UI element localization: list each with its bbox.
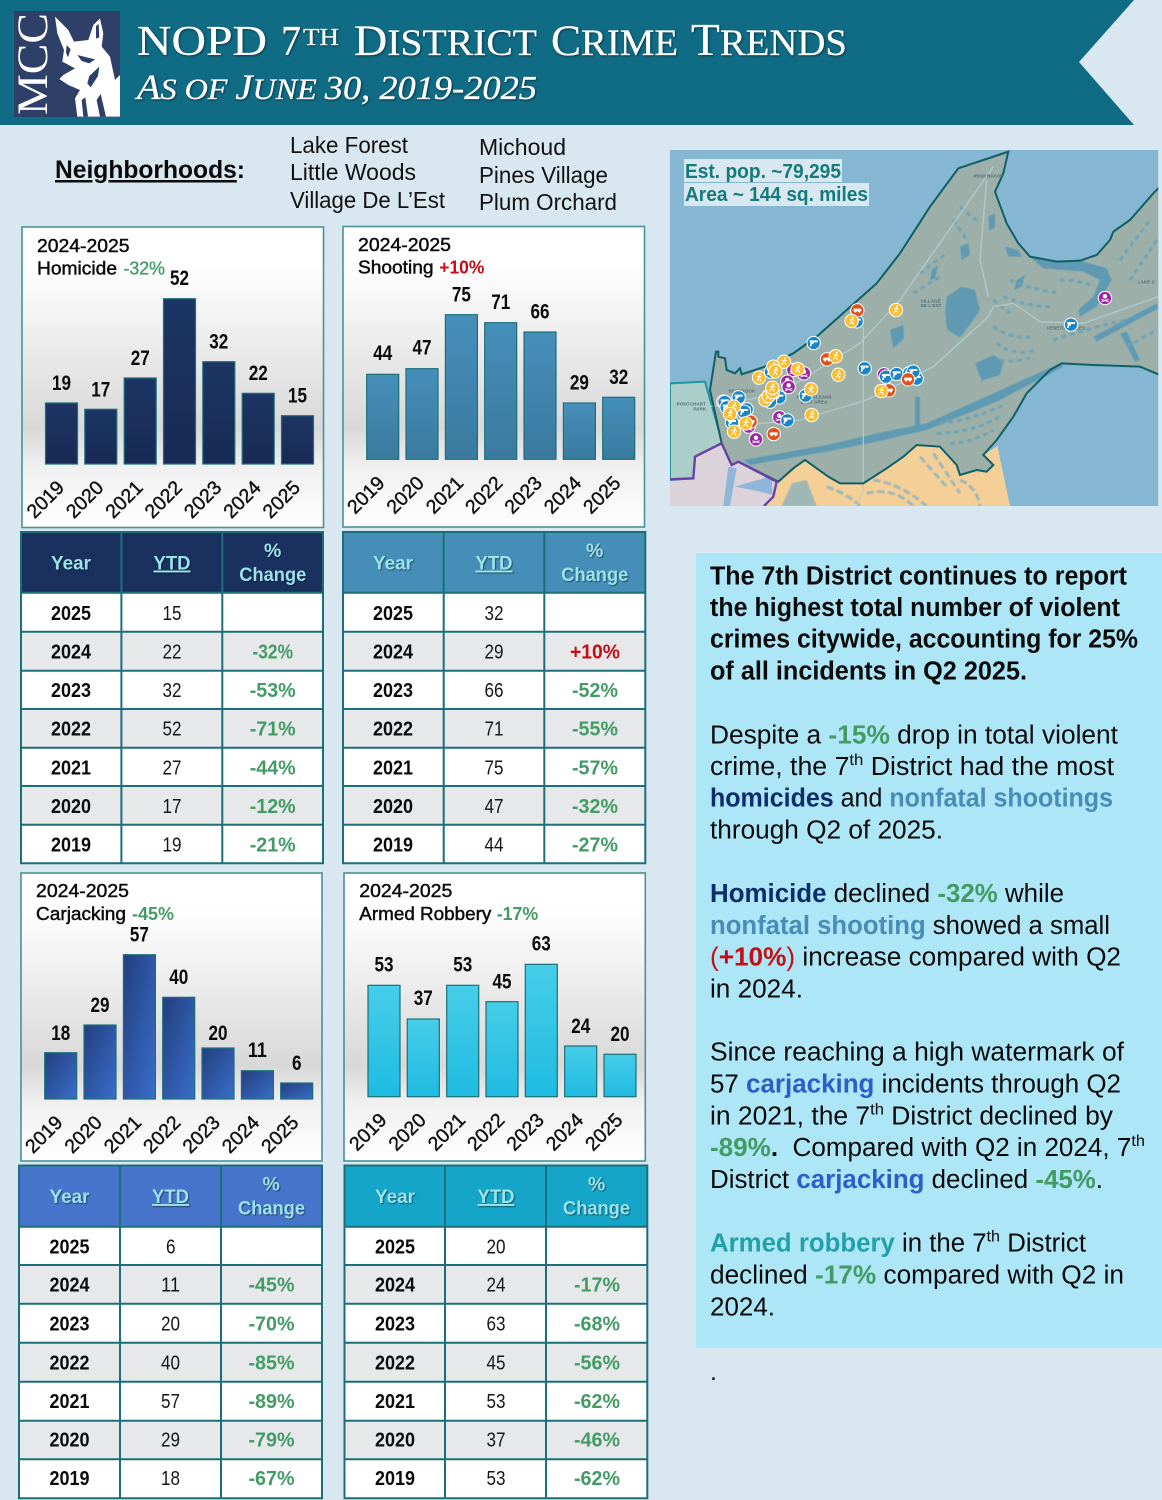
map: place labels: PONTCHART bbox=[677, 401, 706, 406]
table rows: homicide: 2019 bbox=[51, 834, 91, 856]
year axis: carjacking: 2019 bbox=[21, 1112, 67, 1158]
map callout: population and area: Est. pop. ~79,295 bbox=[685, 161, 841, 183]
values: carjacking bbox=[51, 924, 302, 1075]
chart title: carjacking: 2024-2025 bbox=[36, 881, 129, 901]
table rows: shooting: 2019 bbox=[373, 834, 413, 856]
table rows: armed robbery: -56% bbox=[574, 1352, 620, 1374]
table rows: armed robbery: 53 bbox=[486, 1391, 506, 1413]
text: armed robbery bbox=[710, 1229, 1124, 1321]
table rows: carjacking: -45% bbox=[248, 1275, 295, 1297]
logo: MCC wolf: MCC bbox=[10, 13, 57, 115]
values: armed robbery: 45 bbox=[492, 970, 512, 994]
table rows: shooting: 47 bbox=[484, 796, 504, 818]
table: homicide bbox=[21, 532, 323, 863]
table rows: shooting: -52% bbox=[572, 680, 618, 702]
values: homicide: 17 bbox=[91, 378, 110, 401]
panel: narrative bbox=[696, 553, 1162, 1348]
text: homicide and shooting bbox=[710, 880, 1121, 1003]
values: carjacking: 18 bbox=[51, 1022, 70, 1045]
year axis: homicide: 2023 bbox=[180, 477, 226, 523]
table header: armed robbery: YTD bbox=[478, 1186, 514, 1208]
title: NOPD bbox=[137, 19, 267, 65]
table rows: homicide: 2024 bbox=[51, 641, 92, 663]
table header: shooting: % bbox=[586, 540, 603, 562]
table rows: armed robbery: 2020 bbox=[375, 1430, 415, 1452]
year axis: shooting: 2024 bbox=[540, 472, 586, 518]
table rows: shooting: -27% bbox=[572, 834, 618, 856]
table rows: homicide: 15 bbox=[162, 603, 182, 625]
map: place labels: PARK bbox=[693, 407, 707, 412]
table rows: homicide: 19 bbox=[162, 834, 182, 856]
logo: MCC wolf bbox=[10, 11, 120, 117]
neighborhoods list, column 1 bbox=[290, 132, 446, 213]
year axis: shooting: 2020 bbox=[382, 472, 429, 518]
year axis: homicide: 2022 bbox=[141, 477, 187, 523]
text: key finding bbox=[710, 562, 1138, 685]
map: place labels: DE L'EST bbox=[921, 303, 942, 308]
table rows: homicide: -12% bbox=[250, 796, 296, 818]
year axis: carjacking: 2024 bbox=[218, 1112, 264, 1158]
table rows: shooting: 2023 bbox=[373, 680, 413, 702]
map: waterways bbox=[743, 213, 1158, 465]
values: carjacking: 11 bbox=[248, 1039, 267, 1062]
table rows: homicide: 2022 bbox=[51, 718, 91, 740]
text: carjacking: 57 carjacking incidents through Q2 bbox=[710, 1070, 1121, 1098]
table rows: carjacking: 2022 bbox=[50, 1352, 90, 1374]
bars: shooting bbox=[367, 315, 635, 459]
text: homicide and shooting: Homicide declined -32% while bbox=[710, 880, 1064, 908]
text: overall drop: crime, the 7 bbox=[710, 753, 843, 781]
values: homicide: 32 bbox=[209, 330, 228, 354]
table rows: armed robbery: 37 bbox=[486, 1430, 506, 1452]
title bbox=[137, 15, 847, 65]
text: carjacking bbox=[710, 1039, 1145, 1194]
table rows: shooting: -55% bbox=[572, 718, 618, 740]
table rows: shooting: 2024 bbox=[373, 641, 414, 663]
year axis: armed robbery: 2022 bbox=[463, 1109, 509, 1155]
neighborhoods list, column 2: Michoud bbox=[479, 134, 566, 160]
values: shooting: 44 bbox=[373, 342, 392, 365]
chart title: armed robbery bbox=[359, 881, 538, 924]
map: place labels: VILLAGE bbox=[921, 298, 941, 303]
table rows: shooting: 2020 bbox=[373, 796, 413, 818]
chart title: shooting: 2024-2025 bbox=[358, 235, 451, 255]
text: key finding: crimes citywide, accounting for 25% bbox=[710, 626, 1138, 654]
table rows: homicide: 17 bbox=[162, 796, 182, 818]
title: TH bbox=[303, 25, 339, 51]
table rows: shooting: 2022 bbox=[373, 718, 413, 740]
table rows: shooting: 71 bbox=[484, 718, 504, 740]
table header: shooting: Change bbox=[561, 564, 628, 586]
year axis: shooting: 2023 bbox=[500, 472, 547, 518]
header banner bbox=[0, 0, 1134, 125]
year axis: carjacking: 2025 bbox=[257, 1112, 303, 1158]
table header: armed robbery: Year bbox=[375, 1186, 415, 1208]
title: DISTRICT bbox=[354, 18, 537, 65]
text: armed robbery: Armed robbery in the 7 bbox=[710, 1230, 986, 1258]
table rows: shooting: -57% bbox=[572, 757, 618, 779]
values: armed robbery bbox=[374, 933, 630, 1046]
year axis: shooting bbox=[343, 472, 625, 518]
values: armed robbery: 37 bbox=[414, 987, 433, 1010]
map: place labels: EAST AREA bbox=[801, 400, 828, 405]
text: armed robbery: 2024. bbox=[710, 1293, 775, 1321]
table rows: carjacking: 18 bbox=[161, 1468, 180, 1490]
table rows: armed robbery: -62% bbox=[574, 1468, 620, 1490]
values: shooting: 66 bbox=[530, 300, 550, 324]
text: overall drop: th bbox=[849, 752, 863, 769]
text: carjacking: -89%. Compared with Q2 in 2024, 7 bbox=[710, 1134, 1124, 1162]
text: homicide and shooting: (+10%) increase compared with Q2 bbox=[710, 944, 1121, 972]
table rows: homicide: -21% bbox=[250, 834, 296, 856]
text: overall drop: homicides and nonfatal shootings bbox=[710, 785, 1113, 813]
chart title: homicide bbox=[37, 236, 165, 278]
chart title: shooting bbox=[358, 235, 484, 278]
table rows: armed robbery: 63 bbox=[486, 1313, 506, 1335]
year axis: homicide: 2021 bbox=[101, 477, 148, 523]
table rows: armed robbery: -17% bbox=[574, 1275, 620, 1297]
title: TRENDS bbox=[691, 15, 847, 65]
title: CRIME bbox=[551, 18, 678, 65]
table rows: homicide: 2020 bbox=[51, 796, 91, 818]
chart title: shooting: +10% bbox=[439, 258, 484, 278]
map: sand area bbox=[767, 445, 1010, 506]
values: shooting: 32 bbox=[609, 366, 628, 389]
table header: shooting: YTD bbox=[476, 552, 512, 574]
neighborhoods list, column 1: Little Woods bbox=[290, 159, 416, 185]
table rows: shooting: -32% bbox=[572, 796, 618, 818]
table rows: armed robbery: 24 bbox=[486, 1275, 506, 1297]
table rows: armed robbery: 2025 bbox=[375, 1236, 415, 1258]
table rows: shooting: 29 bbox=[484, 641, 504, 663]
chart title: armed robbery: Armed Robbery bbox=[359, 904, 491, 924]
year axis: armed robbery: 2024 bbox=[542, 1109, 588, 1155]
table rows: carjacking: 6 bbox=[166, 1236, 176, 1258]
chart title: armed robbery: -17% bbox=[497, 904, 538, 924]
values: shooting bbox=[373, 284, 628, 394]
text: carjacking: th bbox=[870, 1101, 884, 1118]
values: homicide: 52 bbox=[170, 267, 189, 290]
values: shooting: 75 bbox=[452, 284, 471, 306]
chart title: shooting: Shooting bbox=[358, 258, 434, 278]
year axis: homicide: 2019 bbox=[23, 477, 69, 523]
table rows: homicide: 22 bbox=[162, 641, 182, 663]
chart title: carjacking: Carjacking bbox=[36, 904, 126, 924]
table rows: homicide: -71% bbox=[250, 718, 296, 740]
map: place labels: SEABROOK bbox=[728, 388, 756, 393]
panel: carjacking chart bbox=[21, 873, 322, 1161]
map: incident markers bbox=[717, 291, 1112, 446]
map: 7th district land bbox=[710, 152, 1158, 483]
neighborhoods list, column 2 bbox=[479, 134, 617, 215]
table rows: homicide: -32% bbox=[252, 641, 293, 663]
year axis: shooting: 2022 bbox=[461, 472, 507, 518]
text: key finding: The 7th District continues to report bbox=[710, 562, 1127, 590]
chart title: carjacking bbox=[36, 881, 174, 924]
year axis: carjacking: 2020 bbox=[60, 1112, 107, 1158]
year axis: armed robbery: 2025 bbox=[581, 1109, 627, 1155]
table rows: homicide: 27 bbox=[162, 757, 182, 779]
year axis: homicide bbox=[23, 477, 305, 523]
map: 7th district incidents bbox=[670, 150, 1160, 506]
year axis: carjacking: 2021 bbox=[100, 1112, 146, 1158]
table rows: shooting: 75 bbox=[484, 757, 504, 779]
values: armed robbery: 63 bbox=[532, 933, 551, 956]
year axis: homicide: 2025 bbox=[259, 477, 305, 523]
table header: homicide bbox=[51, 540, 306, 586]
table rows: armed robbery: -62% bbox=[574, 1391, 620, 1413]
chart title: homicide: 2024-2025 bbox=[37, 236, 130, 256]
neighborhoods heading: Neighborhoods: bbox=[55, 156, 245, 184]
map callout: population and area bbox=[684, 159, 869, 206]
chart title: carjacking: -45% bbox=[132, 904, 174, 924]
text: overall drop bbox=[710, 721, 1118, 844]
table rows: carjacking: -89% bbox=[248, 1391, 295, 1413]
values: carjacking: 40 bbox=[169, 966, 188, 989]
table: carjacking bbox=[19, 1166, 322, 1498]
table rows: carjacking: -85% bbox=[248, 1352, 295, 1374]
table header: carjacking: Change bbox=[238, 1198, 305, 1220]
values: homicide: 19 bbox=[52, 372, 71, 395]
values: shooting: 71 bbox=[491, 291, 510, 314]
stray period: . bbox=[710, 1358, 717, 1386]
map: place labels: LAKE C bbox=[1138, 279, 1156, 284]
values: armed robbery: 24 bbox=[571, 1015, 590, 1038]
map: marsh texture bbox=[913, 207, 1157, 443]
table rows: carjacking: 20 bbox=[161, 1313, 180, 1335]
title: 7 bbox=[281, 19, 301, 65]
values: homicide bbox=[52, 267, 307, 408]
table rows: homicide: 52 bbox=[162, 718, 182, 740]
table rows: armed robbery: 2024 bbox=[375, 1275, 416, 1297]
table rows: carjacking: 2024 bbox=[50, 1275, 90, 1297]
values: carjacking: 29 bbox=[90, 994, 110, 1017]
table rows: armed robbery: 2022 bbox=[375, 1352, 415, 1374]
year axis: armed robbery: 2021 bbox=[424, 1109, 470, 1155]
year axis: armed robbery: 2023 bbox=[502, 1109, 549, 1155]
table rows: shooting: 2021 bbox=[373, 757, 413, 779]
table header: homicide: % bbox=[264, 540, 281, 562]
table header: armed robbery: Change bbox=[563, 1198, 630, 1220]
chart title: homicide: Homicide bbox=[37, 258, 117, 278]
year axis: shooting: 2025 bbox=[579, 472, 625, 518]
values: shooting: 29 bbox=[570, 372, 589, 394]
panel: homicide chart bbox=[22, 227, 324, 528]
map: neighbouring district, teal bbox=[670, 382, 722, 480]
text: carjacking: th bbox=[1131, 1133, 1145, 1150]
table rows: armed robbery: 53 bbox=[486, 1468, 506, 1490]
table rows: carjacking: -79% bbox=[248, 1430, 295, 1452]
table rows: carjacking bbox=[50, 1236, 295, 1490]
table header: shooting: Year bbox=[373, 552, 413, 574]
table rows: homicide: 2021 bbox=[51, 757, 91, 779]
map: marsh water in sand bbox=[782, 453, 980, 506]
table header: carjacking: Year bbox=[50, 1186, 90, 1208]
year axis: shooting: 2021 bbox=[422, 472, 468, 518]
map: place labels: VENETIAN ISLES bbox=[1047, 326, 1085, 331]
map: roads bbox=[710, 167, 1158, 506]
values: shooting: 47 bbox=[412, 336, 432, 360]
year axis: homicide: 2024 bbox=[219, 477, 266, 523]
values: armed robbery: 53 bbox=[374, 954, 394, 977]
neighborhoods list, column 2: Pines Village bbox=[479, 162, 608, 188]
chart title: homicide: -32% bbox=[124, 258, 165, 278]
table rows: armed robbery: 20 bbox=[486, 1236, 506, 1258]
values: armed robbery: 20 bbox=[610, 1023, 630, 1046]
map callout: population and area: Area ~ 144 sq. miles bbox=[685, 184, 868, 206]
table header: homicide: YTD bbox=[154, 552, 190, 574]
table rows: armed robbery: 2021 bbox=[375, 1391, 415, 1413]
text: overall drop: District had the most bbox=[863, 753, 1114, 781]
map: place labels: IRISH BAYOU bbox=[973, 174, 1004, 179]
table rows: shooting: +10% bbox=[570, 641, 620, 663]
values: armed robbery: 53 bbox=[453, 954, 472, 977]
map: place labels: NEW ORLEANS bbox=[797, 395, 832, 400]
table rows: carjacking: 2020 bbox=[50, 1430, 90, 1452]
text: overall drop: Despite a -15% drop in total violent bbox=[710, 721, 1118, 749]
map: neighbouring boundary, purple bbox=[670, 443, 777, 506]
text: overall drop: through Q2 of 2025. bbox=[710, 816, 943, 844]
table rows: carjacking: -70% bbox=[248, 1313, 295, 1335]
table rows: homicide: 2025 bbox=[51, 603, 91, 625]
neighborhoods list, column 2: Plum Orchard bbox=[479, 189, 617, 215]
text: key finding: the highest total number of violent bbox=[710, 594, 1120, 622]
table header: homicide: Year bbox=[51, 552, 91, 574]
year axis: armed robbery bbox=[345, 1109, 627, 1155]
text: armed robbery: declined -17% compared with Q2 in bbox=[710, 1262, 1124, 1290]
table rows: carjacking: 11 bbox=[161, 1275, 180, 1297]
table header: carjacking: % bbox=[262, 1174, 280, 1196]
table rows: shooting: 2025 bbox=[373, 603, 413, 625]
text: carjacking: in 2021, the 7 bbox=[710, 1102, 865, 1130]
text: homicide and shooting: in 2024. bbox=[710, 975, 803, 1003]
table rows: armed robbery bbox=[375, 1236, 620, 1490]
table rows: homicide: -44% bbox=[250, 757, 296, 779]
year axis: carjacking bbox=[21, 1112, 303, 1158]
bars: carjacking bbox=[45, 955, 313, 1099]
table header: carjacking: YTD bbox=[152, 1186, 189, 1208]
text: carjacking: District declined by bbox=[884, 1102, 1113, 1130]
table header: homicide: Change bbox=[239, 564, 306, 586]
table rows: carjacking: 2021 bbox=[50, 1391, 90, 1413]
table header: shooting bbox=[373, 540, 628, 586]
table rows: carjacking: 2019 bbox=[50, 1468, 90, 1490]
table rows: carjacking: 29 bbox=[161, 1430, 180, 1452]
table rows: armed robbery: 2023 bbox=[375, 1313, 415, 1335]
subtitle: AS OF JUNE 30, 2019-2025 bbox=[135, 67, 537, 107]
values: carjacking: 6 bbox=[292, 1052, 302, 1075]
values: carjacking: 20 bbox=[208, 1022, 228, 1045]
year axis: homicide: 2020 bbox=[62, 477, 108, 523]
table rows: carjacking: 40 bbox=[161, 1352, 180, 1374]
table: armed robbery bbox=[344, 1166, 648, 1498]
map: place labels bbox=[677, 174, 1156, 412]
year axis: carjacking: 2023 bbox=[178, 1112, 225, 1158]
text: carjacking: Since reaching a high watermark of bbox=[710, 1039, 1125, 1067]
bars: armed robbery bbox=[368, 964, 636, 1097]
text: armed robbery: th bbox=[987, 1229, 1000, 1246]
values: homicide: 15 bbox=[288, 384, 307, 408]
year axis: shooting: 2019 bbox=[343, 472, 389, 518]
panel: shooting chart bbox=[343, 226, 644, 527]
text: armed robbery: District bbox=[1000, 1230, 1086, 1258]
neighborhoods list, column 1: Village De L’Est bbox=[290, 187, 446, 213]
year axis: armed robbery: 2019 bbox=[345, 1109, 391, 1155]
table rows: carjacking: -67% bbox=[248, 1468, 295, 1490]
neighborhoods list, column 1: Lake Forest bbox=[290, 132, 409, 158]
panel: armed robbery chart bbox=[344, 873, 645, 1161]
text: carjacking: District carjacking declined -45%. bbox=[710, 1166, 1103, 1194]
table header: armed robbery bbox=[375, 1174, 630, 1220]
table rows: homicide: 2023 bbox=[51, 680, 91, 702]
table rows: armed robbery: -46% bbox=[574, 1430, 620, 1452]
table rows: carjacking: 2025 bbox=[50, 1236, 90, 1258]
map: district outline bbox=[710, 152, 1160, 483]
values: homicide: 22 bbox=[249, 362, 268, 385]
table rows: homicide: -53% bbox=[250, 680, 296, 702]
table rows: shooting: 32 bbox=[484, 603, 504, 625]
table rows: homicide bbox=[51, 603, 296, 856]
values: homicide: 27 bbox=[131, 347, 150, 370]
table header: carjacking bbox=[50, 1174, 305, 1220]
table rows: armed robbery: 2019 bbox=[375, 1468, 415, 1490]
table rows: homicide: 32 bbox=[162, 680, 182, 702]
table rows: shooting: 66 bbox=[484, 680, 504, 702]
text: homicide and shooting: nonfatal shooting showed a small bbox=[710, 912, 1110, 940]
values: carjacking: 57 bbox=[130, 924, 149, 946]
table header: armed robbery: % bbox=[588, 1174, 605, 1196]
year axis: armed robbery: 2020 bbox=[384, 1109, 431, 1155]
table: shooting bbox=[343, 532, 645, 863]
table rows: carjacking: 2023 bbox=[50, 1313, 90, 1335]
chart title: armed robbery: 2024-2025 bbox=[359, 881, 452, 901]
table rows: shooting bbox=[373, 603, 620, 856]
table rows: carjacking: 57 bbox=[161, 1391, 180, 1413]
table rows: armed robbery: 45 bbox=[486, 1352, 506, 1374]
map: neighbouring district, pink bbox=[670, 443, 777, 506]
text: key finding: of all incidents in Q2 2025. bbox=[710, 657, 1027, 685]
year axis: carjacking: 2022 bbox=[139, 1112, 185, 1158]
table rows: armed robbery: -68% bbox=[574, 1313, 620, 1335]
bars: homicide bbox=[46, 299, 314, 464]
table rows: shooting: 44 bbox=[484, 834, 504, 856]
